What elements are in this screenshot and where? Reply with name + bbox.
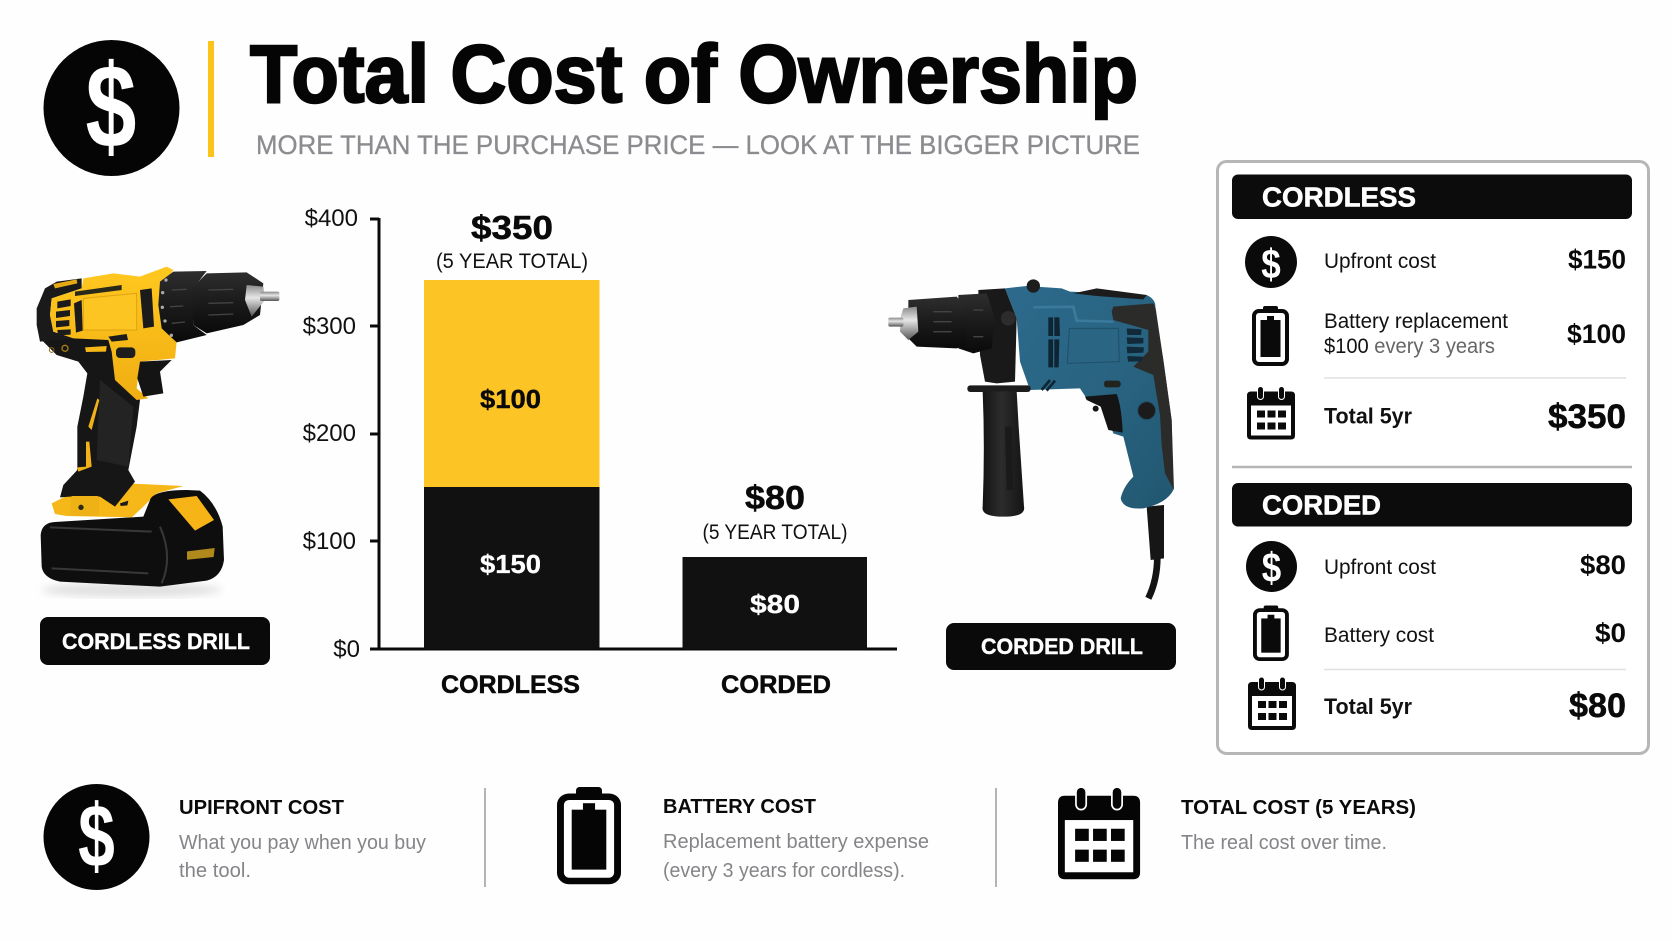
legend: upfront cost — [44, 784, 426, 890]
value labels: $80 — [745, 479, 805, 516]
bar: cordless upfront — [424, 487, 600, 649]
row: cordless upfront: Upfront cost — [1324, 250, 1436, 273]
row: corded upfront — [1246, 541, 1626, 592]
legend: upfront cost: UPIFRONT COST — [179, 797, 344, 819]
value labels: $150 — [480, 549, 541, 579]
row: corded upfront: $80 — [1580, 550, 1626, 580]
label: cordless drill — [40, 617, 270, 665]
image: corded drill — [888, 279, 1174, 598]
body — [1005, 286, 1173, 509]
five year notes: (5 YEAR TOTAL) — [436, 250, 588, 273]
panel frame — [1218, 162, 1648, 754]
yellow accent bar — [208, 41, 214, 157]
body details — [83, 293, 137, 330]
legend: upfront cost: $ — [78, 786, 115, 886]
axes — [370, 218, 897, 649]
handle and rear waist — [42, 327, 140, 507]
chuck — [158, 271, 207, 342]
legend: battery cost — [560, 787, 929, 882]
row: cordless total: Total 5yr — [1324, 404, 1412, 428]
side-handle clamp — [978, 288, 1017, 383]
row: corded total: $80 — [1569, 687, 1626, 725]
y axis labels — [303, 205, 360, 663]
row: cordless total — [1247, 386, 1626, 440]
stacked bar chart — [303, 205, 897, 699]
label: corded drill — [946, 623, 1176, 670]
row: cordless battery — [1254, 306, 1626, 364]
header: cordless — [1232, 174, 1632, 219]
row: cordless upfront: $150 — [1568, 244, 1626, 274]
icon: header dollar coin: $ — [86, 41, 136, 173]
y axis labels: $0 — [333, 636, 360, 663]
trigger — [1085, 394, 1123, 433]
bar: corded — [682, 557, 867, 649]
row: corded upfront: Upfront cost — [1324, 556, 1436, 579]
row: cordless upfront: $ — [1261, 242, 1281, 288]
five year notes: (5 YEAR TOTAL) — [702, 521, 848, 544]
cord — [1148, 508, 1157, 598]
image: cordless drill — [37, 267, 279, 597]
rear cap — [37, 278, 82, 342]
row: corded battery: Battery cost — [1324, 624, 1434, 647]
value labels — [441, 209, 831, 699]
value labels: $80 — [750, 589, 800, 619]
trigger — [137, 360, 172, 397]
panel: cost breakdown — [1218, 162, 1648, 754]
row: corded battery — [1255, 606, 1626, 659]
row: corded total: Total 5yr — [1324, 694, 1412, 719]
row: cordless battery: $100 every 3 years — [1324, 335, 1495, 358]
y axis labels: $200 — [303, 420, 356, 447]
legend: upfront cost: What you pay when you buy — [179, 832, 426, 854]
legend: battery cost: (every 3 years for cordless). — [663, 860, 905, 882]
legend: battery cost: Replacement battery expense — [663, 831, 929, 853]
label: cordless drill: CORDLESS DRILL — [62, 629, 250, 654]
row: corded upfront: $ — [1262, 545, 1281, 592]
y axis labels: $400 — [305, 205, 358, 232]
battery — [41, 490, 224, 587]
header: cordless: CORDLESS — [1262, 182, 1416, 212]
value labels: $350 — [471, 209, 553, 246]
row: corded battery: $0 — [1595, 618, 1626, 648]
value labels: CORDLESS — [441, 671, 580, 699]
y axis labels: $100 — [303, 528, 356, 555]
five year notes — [436, 250, 848, 544]
bar: cordless battery — [424, 280, 600, 487]
legend: upfront cost: the tool. — [179, 860, 251, 882]
header: corded — [1232, 483, 1632, 526]
row: corded total — [1248, 677, 1626, 730]
legend: total cost — [1058, 787, 1416, 879]
side handle — [967, 385, 1031, 392]
legend: total cost: TOTAL COST (5 YEARS) — [1181, 797, 1416, 819]
row: cordless total: $350 — [1548, 398, 1626, 436]
icon: header dollar coin — [44, 40, 180, 176]
legend: total cost: The real cost over time. — [1181, 832, 1387, 854]
value labels: CORDED — [721, 671, 831, 699]
yellow body — [50, 267, 177, 400]
legend: battery cost: BATTERY COST — [663, 796, 816, 818]
row: cordless battery: $100 — [1567, 319, 1626, 349]
row: cordless battery: Battery replacement — [1324, 310, 1508, 333]
chuck — [958, 293, 995, 353]
subtitle: MORE THAN THE PURCHASE PRICE — LOOK AT THE BIGGER PICTURE — [256, 130, 1140, 160]
value labels: $100 — [480, 384, 541, 414]
label: corded drill: CORDED DRILL — [981, 634, 1143, 659]
foot and plate — [52, 483, 183, 517]
header: corded: CORDED — [1262, 490, 1381, 520]
row: cordless upfront — [1245, 236, 1626, 288]
rear grip — [1112, 303, 1174, 490]
title: Total Cost of Ownership — [250, 29, 1138, 120]
y axis labels: $300 — [303, 313, 356, 340]
